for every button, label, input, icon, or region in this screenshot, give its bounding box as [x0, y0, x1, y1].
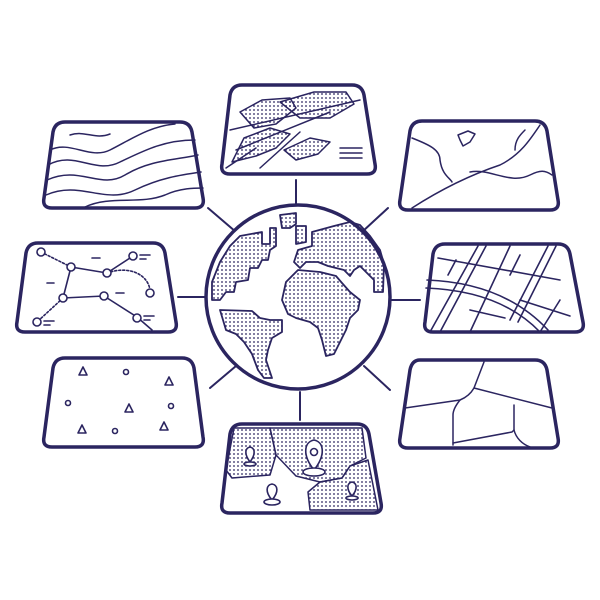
panel: top right river — [400, 121, 558, 210]
panel: bottom left symbols — [44, 358, 203, 447]
greenland — [280, 213, 296, 228]
panel: middle left constellation — [17, 243, 176, 332]
south america — [220, 310, 282, 378]
panel: middle right streets — [425, 244, 583, 332]
north america — [212, 228, 276, 300]
globe — [206, 205, 390, 389]
panel: top left topography — [44, 122, 203, 208]
africa — [282, 270, 360, 356]
europe/asia — [296, 226, 306, 244]
connectors — [178, 180, 420, 420]
panel: top center — [222, 85, 375, 174]
panel: bottom center pins — [222, 424, 381, 513]
panel: bottom right regions — [400, 360, 558, 448]
